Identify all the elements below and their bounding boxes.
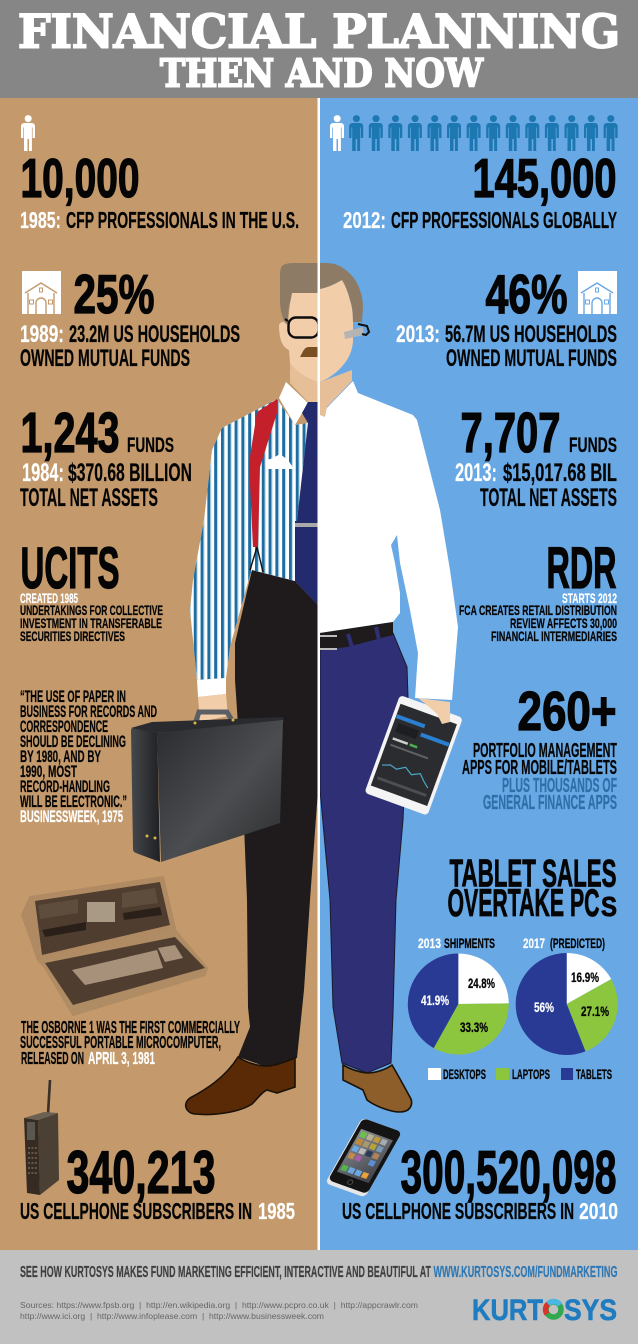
legend: LAPTOPS [512, 1066, 550, 1082]
stat: cellphone subscribers 1985: US CELLPHONE SUBSCRIBERS IN [20, 1198, 252, 1224]
legend [428, 1066, 612, 1082]
stat: mutual funds 2013 [396, 263, 617, 372]
pie chart: 2013 shipments: 33.3% [460, 1020, 488, 1035]
stat: mutual funds 1989: OWNED MUTUAL FUNDS [20, 345, 190, 372]
left neck [290, 355, 318, 402]
stat: CFP professionals 2012 [330, 115, 618, 233]
sources: Sources: https://www.fpsb.org | http://en.wikipedia.org | http://www.pcpro.co.uk | http://appcrawlr.com [20, 1300, 418, 1310]
block: UCITS: CREATED 1985 [20, 590, 78, 606]
logo: Kurtosys [472, 1294, 617, 1327]
stat: funds 1984 [20, 401, 192, 512]
stat: cellphone subscribers 1985: 1985 [258, 1198, 295, 1224]
icon: smartphone [325, 1118, 402, 1197]
left collar [279, 382, 308, 425]
pocket square [266, 454, 294, 469]
quote: BusinessWeek: “THE USE OF PAPER IN [20, 687, 126, 706]
icon: house [22, 271, 61, 314]
right trousers [320, 633, 408, 1073]
moustache [300, 347, 318, 357]
right neck [320, 370, 352, 417]
stat: funds 2013 [455, 401, 617, 512]
quote: BusinessWeek: RECORD-HANDLING [20, 777, 110, 796]
stat: cellphone subscribers 2010 [342, 1139, 618, 1224]
stat: funds 1984: TOTAL NET ASSETS [20, 484, 158, 512]
left trousers [235, 570, 318, 1067]
left trousers waist over tie [295, 521, 318, 605]
pie chart: 2017 predicted: 16.9% [571, 970, 599, 985]
tie [297, 402, 318, 521]
pie chart: 2017 predicted: 27.1% [581, 1004, 609, 1019]
left cuff [197, 678, 226, 697]
stat: funds 1984: $370.68 BILLION [68, 459, 192, 487]
tie clip [295, 523, 318, 527]
text: Osborne caption: SUCCESSFUL PORTABLE MICROCOMPUTER, [20, 1032, 221, 1052]
logo: Kurtosys: SYS [564, 1294, 617, 1327]
stat: mutual funds 1989: 23.2M US HOUSEHOLDS [69, 321, 240, 348]
pie chart: 2013 shipments: SHIPMENTS [444, 935, 495, 951]
divider [318, 98, 320, 1250]
text: Osborne caption [20, 1017, 240, 1068]
pie chart: 2017 predicted: 56% [534, 1000, 554, 1015]
left hair [280, 263, 318, 324]
quote: BusinessWeek: BUSINESSWEEK, 1975 [20, 807, 123, 826]
stat: mutual funds 2013: 2013: [396, 321, 440, 348]
background panel: then (tan) [0, 98, 318, 1250]
belt loops [348, 627, 379, 647]
briefcase [131, 712, 284, 862]
left hand [198, 694, 228, 722]
text: Osborne caption: APRIL 3, 1981 [88, 1048, 155, 1068]
legend: TABLETS [576, 1066, 612, 1082]
right shoe [343, 1065, 412, 1112]
text: Osborne caption: RELEASED ON [21, 1048, 84, 1068]
quote: BusinessWeek: BUSINESS FOR RECORDS AND [20, 702, 157, 721]
pie chart: 2017 predicted: (PREDICTED) [550, 935, 605, 951]
figure: half-and-half man [185, 263, 458, 1115]
sources: http://www.ici.org | http://www.infoplease.com | http://www.businessweek.com [20, 1311, 324, 1321]
left face [279, 293, 318, 382]
pie chart: 2017 predicted [516, 935, 618, 1055]
head of person [25, 115, 32, 122]
stat: CFP professionals 1985 [20, 115, 299, 233]
pie chart: 2013 shipments: 24.8% [468, 976, 495, 991]
belt buckle [320, 636, 337, 649]
belt [320, 622, 393, 650]
left striped shirt [185, 395, 310, 685]
right shirt [320, 381, 458, 700]
stat: CFP professionals 1985: 10,000 [20, 147, 140, 209]
stat: CFP professionals 1985: 1985: [20, 207, 61, 233]
block: UCITS: UCITS [20, 536, 119, 601]
legend: DESKTOPS [443, 1066, 486, 1082]
stat: funds 1984: 1,243 [20, 401, 120, 465]
quote: BusinessWeek [20, 687, 157, 826]
heading: tablet sales: S [601, 891, 617, 922]
stat: mutual funds 1989: 1989: [20, 321, 64, 348]
icon: person [21, 123, 35, 151]
logo: Kurtosys: KURT [472, 1294, 543, 1327]
stat: funds 1984: FUNDS [127, 433, 174, 457]
stat: funds 1984: 1984: [22, 459, 64, 487]
quote: BusinessWeek: WILL BE ELECTRONIC.” [20, 792, 127, 811]
heading: tablet sales [448, 852, 617, 925]
stat: 260+ apps [462, 680, 617, 814]
left shoe [186, 1057, 295, 1115]
red suspender [249, 399, 277, 547]
pie chart: 2013 shipments [408, 935, 509, 1054]
stat: 260+ apps: 260+ [518, 680, 616, 742]
stat: mutual funds 2013: 46% [486, 263, 568, 325]
text: Osborne caption: THE OSBORNE 1 WAS THE FIRST COMMERCIALLY [21, 1017, 240, 1037]
quote: BusinessWeek: 1990, MOST [20, 762, 77, 781]
pie chart: 2017 predicted: 2017 [523, 935, 545, 951]
stat: cellphone subscribers 1985 [20, 1139, 295, 1224]
right face [320, 280, 353, 382]
icon row: people [330, 115, 618, 151]
right hair [320, 263, 363, 322]
quote: BusinessWeek: CORRESPONDENCE [20, 717, 108, 736]
block: UCITS: INVESTMENT IN TRANSFERABLE [20, 615, 162, 631]
block: RDR [459, 536, 617, 644]
pie chart: 2013 shipments: 2013 [418, 935, 441, 951]
stat: mutual funds 1989 [20, 263, 240, 372]
header band [0, 0, 638, 98]
stat: funds 2013: 7,707 [460, 401, 560, 465]
sources [20, 1300, 418, 1321]
tablet [364, 695, 463, 816]
block: UCITS: UNDERTAKINGS FOR COLLECTIVE [20, 602, 163, 618]
stat: mutual funds 1989: 25% [74, 263, 154, 325]
stat: funds 2013: 2013: [455, 459, 497, 487]
background panel: now (blue) [320, 98, 638, 1250]
stat: CFP professionals 1985: CFP PROFESSIONALS IN THE U.S. [66, 207, 299, 233]
icon: house [578, 271, 617, 314]
footer [0, 1250, 638, 1344]
stat: cellphone subscribers 2010: 2010 [579, 1198, 618, 1224]
stat: CFP professionals 2012: 2012: [343, 207, 386, 233]
right hand [418, 698, 450, 724]
block: UCITS [20, 536, 163, 644]
quote: BusinessWeek: SHOULD BE DECLINING [20, 732, 126, 751]
pie chart: 2013 shipments: 41.9% [421, 993, 449, 1008]
glasses [285, 318, 318, 338]
stat: cellphone subscribers 1985: 340,213 [66, 1139, 216, 1206]
Osborne computer [22, 877, 207, 1015]
block: UCITS: SECURITIES DIRECTIVES [20, 628, 125, 644]
title line two: THEN AND NOW [160, 50, 484, 96]
quote: BusinessWeek: BY 1980, AND BY [20, 747, 101, 766]
icon: brick phone [24, 1080, 59, 1195]
smart glasses [344, 324, 369, 339]
suspender strap [250, 547, 263, 572]
title line one: FINANCIAL PLANNING [18, 4, 620, 58]
